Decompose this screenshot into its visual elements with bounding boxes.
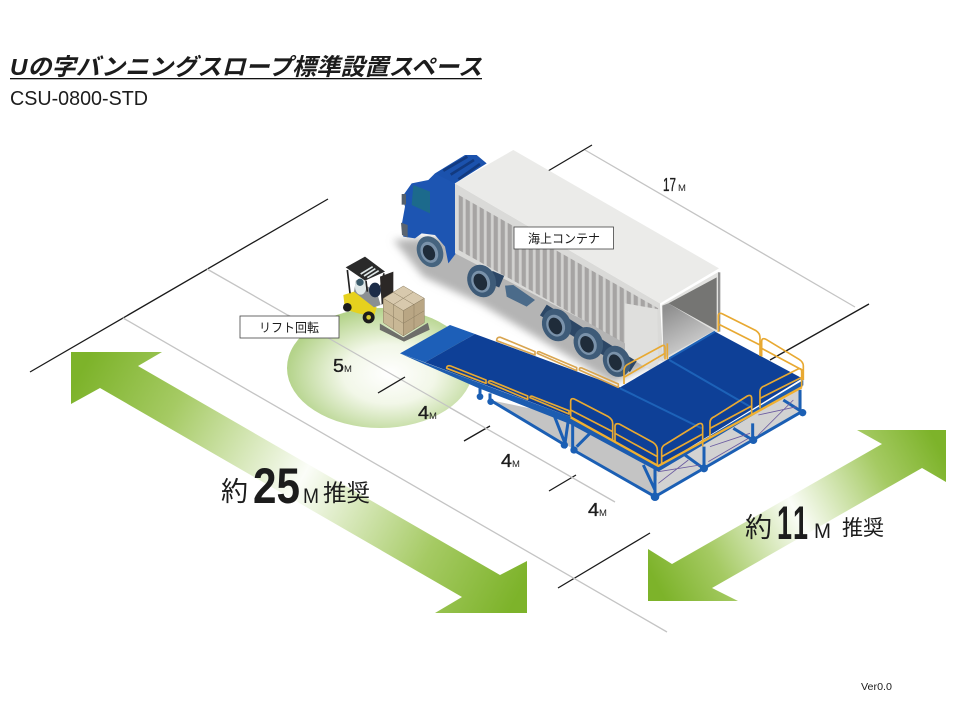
arrow: 11m width: [648, 430, 946, 601]
front wheel: [412, 232, 448, 272]
truck shadow: [393, 237, 667, 383]
dimension: 4m first: M: [429, 411, 437, 422]
container label: 海上コンテナ: [528, 232, 600, 246]
ramp lip: [400, 325, 475, 362]
version: Ver0.0: [861, 682, 892, 693]
container label: [514, 227, 614, 249]
deck surface: [425, 332, 802, 467]
label: 11m recommended: 1: [793, 496, 808, 549]
label: 25m recommended: 25: [253, 458, 300, 514]
label: 11m recommended: 約: [745, 513, 772, 543]
shadow under platform: [490, 383, 802, 497]
dimension: 4m third: 4: [588, 500, 599, 520]
boxes: [383, 286, 424, 336]
pallet: [381, 324, 429, 341]
dimension: 4m second: [501, 451, 520, 471]
turning circle for forklift: [287, 308, 473, 428]
tick over circle: [378, 377, 405, 393]
dimension: 5m: M: [344, 364, 352, 375]
model number: CSU-0800-STD: [10, 88, 148, 110]
truck cab body: [401, 173, 456, 263]
dimension: 17m: 17: [663, 175, 676, 195]
redraw of line over circle: [288, 315, 470, 419]
dimension: 4m third: M: [599, 508, 607, 519]
label: 11m recommended: 推奨: [842, 517, 884, 540]
dimension: 4m third: [588, 500, 607, 520]
dimension: 5m: [333, 356, 352, 376]
axle shadows: [490, 277, 633, 367]
dimension: 4m second: M: [512, 459, 520, 470]
label: 25m recommended: M: [303, 485, 319, 508]
title: Uの字バンニングスロープ標準設置スペース: [10, 54, 483, 80]
forklift with pallet: [343, 257, 429, 341]
truck cab roof fairing: [435, 155, 487, 183]
dimension: 5m: 5: [333, 356, 344, 376]
container rear interior: [662, 272, 720, 362]
dimension: 4m first: [418, 403, 437, 423]
container side wall: [455, 183, 663, 362]
label: 11m recommended: M: [814, 520, 831, 543]
guard rails: [447, 313, 803, 466]
dimension: 17m: M: [678, 183, 686, 194]
label: 25m recommended: [221, 458, 370, 514]
dimension: 4m first: 4: [418, 403, 429, 423]
label: 25m recommended: 推奨: [323, 480, 370, 506]
support legs: [477, 387, 806, 501]
label: 25m recommended: 約: [221, 477, 248, 507]
container roof: [455, 150, 719, 303]
forklift turning label: リフト回転: [259, 321, 319, 335]
truck with container: [393, 150, 720, 383]
arrow: 25m width: [71, 352, 527, 613]
deck plate seams: [620, 332, 750, 428]
forklift turning label: [240, 316, 339, 338]
container door: [625, 303, 658, 375]
label: 11m recommended: [745, 496, 884, 549]
loading ramp and platform: [400, 313, 806, 501]
dimension lines: [30, 145, 869, 632]
dimension: 4m second: 4: [501, 451, 512, 471]
container ribs: [459, 195, 658, 343]
forklift cage: [346, 257, 393, 305]
label: 11m recommended: 1: [777, 496, 792, 549]
rear wheels: [462, 260, 636, 381]
fuel tank: [505, 285, 535, 307]
ramp side edge: [400, 353, 803, 472]
forklift body: [343, 279, 381, 323]
